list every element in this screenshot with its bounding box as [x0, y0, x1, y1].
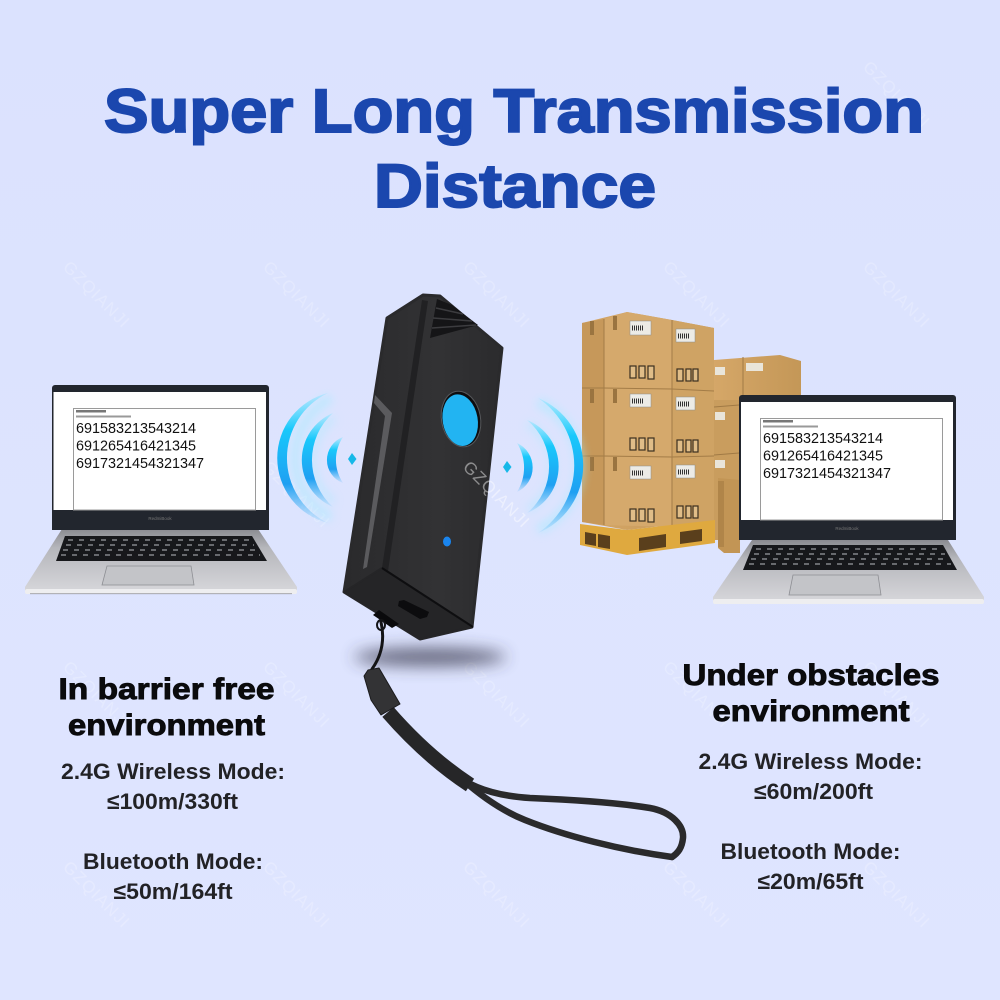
notepad window: 6917321454321347: [763, 466, 891, 482]
bottom face: [344, 568, 472, 639]
left details: ≤100m/330ft: [107, 789, 239, 814]
right details: 2.4G Wireless Mode:: [698, 749, 922, 774]
right details: [698, 749, 922, 894]
notepad window: 691265416421345: [763, 448, 883, 464]
watermarks: GZQIANJI: [859, 657, 934, 732]
right laptop and boxes group: [580, 312, 984, 604]
right details: Bluetooth Mode:: [720, 839, 900, 864]
notepad window: 691583213543214: [76, 421, 196, 437]
watermarks: GZQIANJI: [659, 857, 734, 932]
brand label: RedmiBook: [148, 516, 172, 521]
USB port: [398, 600, 429, 619]
watermarks: GZQIANJI: [859, 857, 934, 932]
right heading: environment: [712, 695, 910, 728]
brand label: RedmiBook: [835, 526, 859, 531]
watermarks: GZQIANJI: [659, 257, 734, 332]
watermarks: GZQIANJI: [59, 257, 134, 332]
right signal waves: [503, 398, 583, 533]
right caption: [682, 659, 940, 894]
left details: [61, 759, 285, 904]
left details: Bluetooth Mode:: [83, 849, 263, 874]
side trim: [363, 395, 392, 569]
watermarks: GZQIANJI: [59, 457, 134, 532]
clasp: [364, 668, 400, 715]
scanner watermark: GZQIANJI: [459, 457, 534, 532]
right heading: Under obstacles: [682, 659, 940, 692]
watermarks: GZQIANJI: [259, 657, 334, 732]
watermarks: GZQIANJI: [259, 457, 334, 532]
notepad window: 691583213543214: [763, 431, 883, 447]
watermarks: [59, 57, 934, 932]
bevel: [382, 300, 428, 571]
watermarks: GZQIANJI: [859, 457, 934, 532]
lanyard loop: [377, 620, 385, 630]
notepad window: [74, 408, 256, 510]
left laptop: [25, 385, 297, 594]
left heading: In barrier free: [58, 673, 274, 706]
strap loop lower: [463, 780, 672, 857]
lanyard slot: [373, 610, 399, 628]
lid: [739, 395, 956, 540]
watermarks: GZQIANJI: [459, 257, 534, 332]
wrist strap: [364, 622, 683, 857]
scanner lens: [437, 388, 485, 450]
cord: [372, 622, 383, 669]
ground shadow: [354, 648, 506, 666]
right details: ≤60m/200ft: [754, 779, 874, 804]
watermarks: GZQIANJI: [859, 57, 934, 132]
cardboard boxes front stack: [582, 312, 714, 530]
right details: ≤20m/65ft: [758, 869, 864, 894]
title: Super Long Transmission: [104, 77, 924, 145]
shipping labels: [630, 321, 695, 479]
watermarks: GZQIANJI: [259, 857, 334, 932]
touchpad: [102, 566, 194, 585]
watermarks: GZQIANJI: [459, 857, 534, 932]
touchpad: [789, 575, 881, 595]
laptop base: [25, 529, 297, 591]
left caption: [58, 673, 285, 904]
wooden pallet: [580, 520, 715, 555]
laptop base: [713, 540, 984, 601]
left heading: environment: [68, 709, 265, 742]
right heading: [682, 659, 940, 728]
keyboard: [743, 545, 957, 570]
left heading: [58, 673, 274, 742]
vents: [430, 299, 478, 338]
watermarks: GZQIANJI: [259, 257, 334, 332]
watermarks: GZQIANJI: [659, 457, 734, 532]
screen: [54, 392, 266, 510]
notepad window: 691265416421345: [76, 438, 196, 454]
scanner body: [344, 295, 502, 639]
title: Distance: [374, 152, 656, 220]
keyboard: [56, 536, 267, 561]
left diamond: [348, 453, 356, 465]
barcode scanner: [344, 295, 534, 639]
notepad window: 6917321454321347: [76, 456, 204, 472]
watermarks: GZQIANJI: [59, 657, 134, 732]
left signal waves: [277, 393, 356, 523]
watermarks: GZQIANJI: [59, 857, 134, 932]
watermarks: GZQIANJI: [859, 257, 934, 332]
title: [104, 77, 924, 220]
watermarks: GZQIANJI: [659, 657, 734, 732]
left details: ≤50m/164ft: [114, 879, 233, 904]
notepad window: [760, 418, 942, 520]
status LED: [443, 536, 451, 546]
cardboard boxes back stack: [714, 355, 801, 553]
handling symbols: [630, 366, 698, 522]
screen: [741, 402, 953, 520]
watermarks: GZQIANJI: [459, 657, 534, 732]
left details: 2.4G Wireless Mode:: [61, 759, 285, 784]
right diamond: [503, 461, 512, 473]
strap loop upper: [463, 780, 683, 857]
lid: [52, 385, 269, 530]
strap main: [388, 712, 470, 785]
